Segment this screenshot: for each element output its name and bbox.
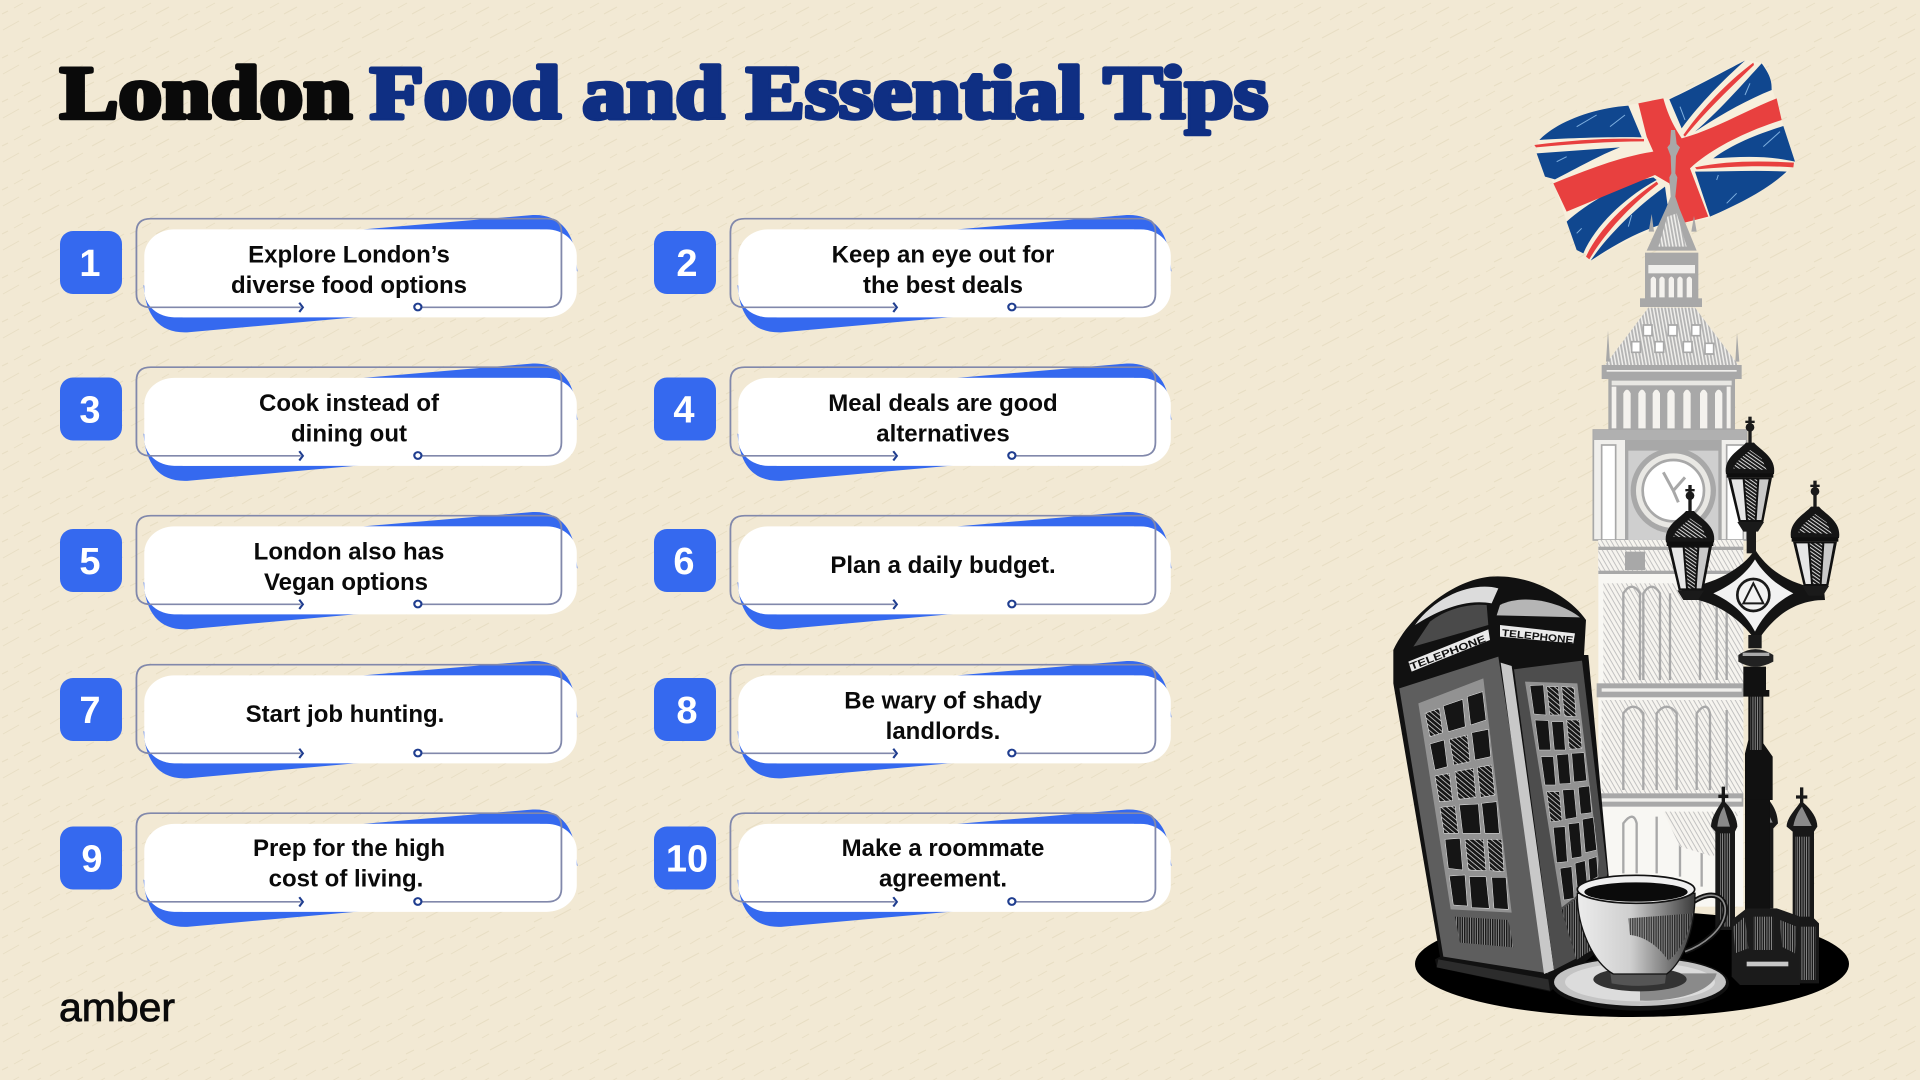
lantern right [1791, 481, 1839, 596]
cup handle [1685, 895, 1725, 952]
number badge 2: 2 [676, 243, 698, 285]
number badge 10 [654, 826, 716, 890]
number badge 10: 10 [666, 838, 708, 880]
number badge 6: 6 [673, 541, 695, 583]
number badge 6 [654, 529, 716, 592]
tip text 5: Vegan options [264, 569, 428, 596]
number badge 4: 4 [673, 390, 695, 432]
black ground ellipse [1415, 911, 1849, 1017]
tip text 4: Meal deals are good [828, 390, 1058, 417]
cup saucer [1551, 956, 1729, 1011]
tip 4 [654, 363, 1171, 481]
tip 6 [654, 512, 1171, 629]
tip text 6: Plan a daily budget. [830, 552, 1056, 579]
tip text 9: cost of living. [269, 866, 423, 892]
lamp arms and quatrefoil [1682, 527, 1825, 648]
title: Food and Essential Tips [370, 52, 1268, 135]
phone box signs [1408, 625, 1575, 673]
tip text 8: landlords. [886, 718, 1000, 745]
tip text 2: the best deals [863, 272, 1023, 299]
card frame 9 [136, 809, 577, 927]
tip text 8: Be wary of shady [844, 688, 1042, 714]
lantern centre [1726, 417, 1774, 532]
number badge 3: 3 [79, 390, 101, 432]
card frame 4 [730, 363, 1171, 481]
card frame 1 [136, 215, 577, 332]
tower spire [1647, 130, 1697, 251]
number badge 9 [60, 826, 122, 890]
number badge 1 [60, 231, 122, 294]
tip text 5: London also has [254, 538, 444, 566]
tip text 3: dining out [291, 420, 407, 448]
tip text 4: alternatives [876, 420, 1010, 448]
tower clock section [1593, 430, 1747, 540]
number badge 1: 1 [79, 243, 101, 285]
tip text 9: Prep for the high [253, 835, 445, 862]
illustration: London scene [1393, 60, 1849, 1017]
number badge 8 [654, 678, 716, 741]
number badge 5 [60, 529, 122, 592]
card frame 6 [730, 512, 1171, 629]
cup bowl [1577, 875, 1695, 986]
lamp side posts [1711, 787, 1819, 983]
card frame 3 [136, 363, 577, 481]
number badge 4 [654, 378, 716, 440]
tip 2 [654, 215, 1171, 332]
tip text 10: Make a roommate [842, 835, 1044, 862]
tip 8 [654, 661, 1171, 778]
tip text 3: Cook instead of [259, 390, 440, 417]
tip 7 [60, 661, 577, 778]
tip 10 [654, 809, 1171, 927]
number badge 3 [60, 378, 122, 440]
tip text 1: diverse food options [231, 272, 467, 299]
tip text 10: agreement. [879, 866, 1007, 892]
tip 9 [60, 809, 577, 927]
tip 5 [60, 512, 577, 629]
card frame 7 [136, 661, 577, 778]
street lamp [1666, 417, 1839, 985]
lantern left [1666, 485, 1714, 600]
number badge 5: 5 [79, 541, 101, 583]
phone box signs: TELEPHONE [1501, 628, 1574, 647]
number badge 7 [60, 678, 122, 741]
amber logo: amber [59, 986, 175, 1030]
number badge 7: 7 [79, 690, 101, 732]
phone box pillar [1501, 663, 1554, 974]
card frame 2 [730, 215, 1171, 332]
tip text 1: Explore London’s [248, 242, 450, 268]
coffee cup [1551, 875, 1729, 1011]
card frame 10 [730, 809, 1171, 927]
lamp main post [1732, 649, 1800, 985]
icon: union jack flag [1534, 60, 1795, 262]
number badge 9: 9 [81, 838, 103, 880]
red phone box [1393, 576, 1610, 992]
phone box left face [1399, 657, 1548, 973]
tip text 7: Start job hunting. [246, 701, 444, 728]
number badge 2 [654, 231, 716, 294]
number badge 8: 8 [676, 690, 698, 732]
tower gallery [1608, 379, 1735, 431]
tip 3 [60, 363, 577, 481]
phone box signs: TELEPHONE [1409, 634, 1488, 673]
phone box base [1437, 959, 1550, 991]
tip text 2: Keep an eye out for [832, 242, 1054, 268]
card frame 5 [136, 512, 577, 629]
tip 1 [60, 215, 577, 332]
tower roof [1602, 308, 1742, 379]
big ben tower [1593, 130, 1747, 907]
card frame 8 [730, 661, 1171, 778]
title: London [60, 52, 352, 135]
phone box right face [1514, 661, 1607, 970]
tower shaft [1597, 540, 1743, 907]
tower belfry [1640, 253, 1702, 307]
